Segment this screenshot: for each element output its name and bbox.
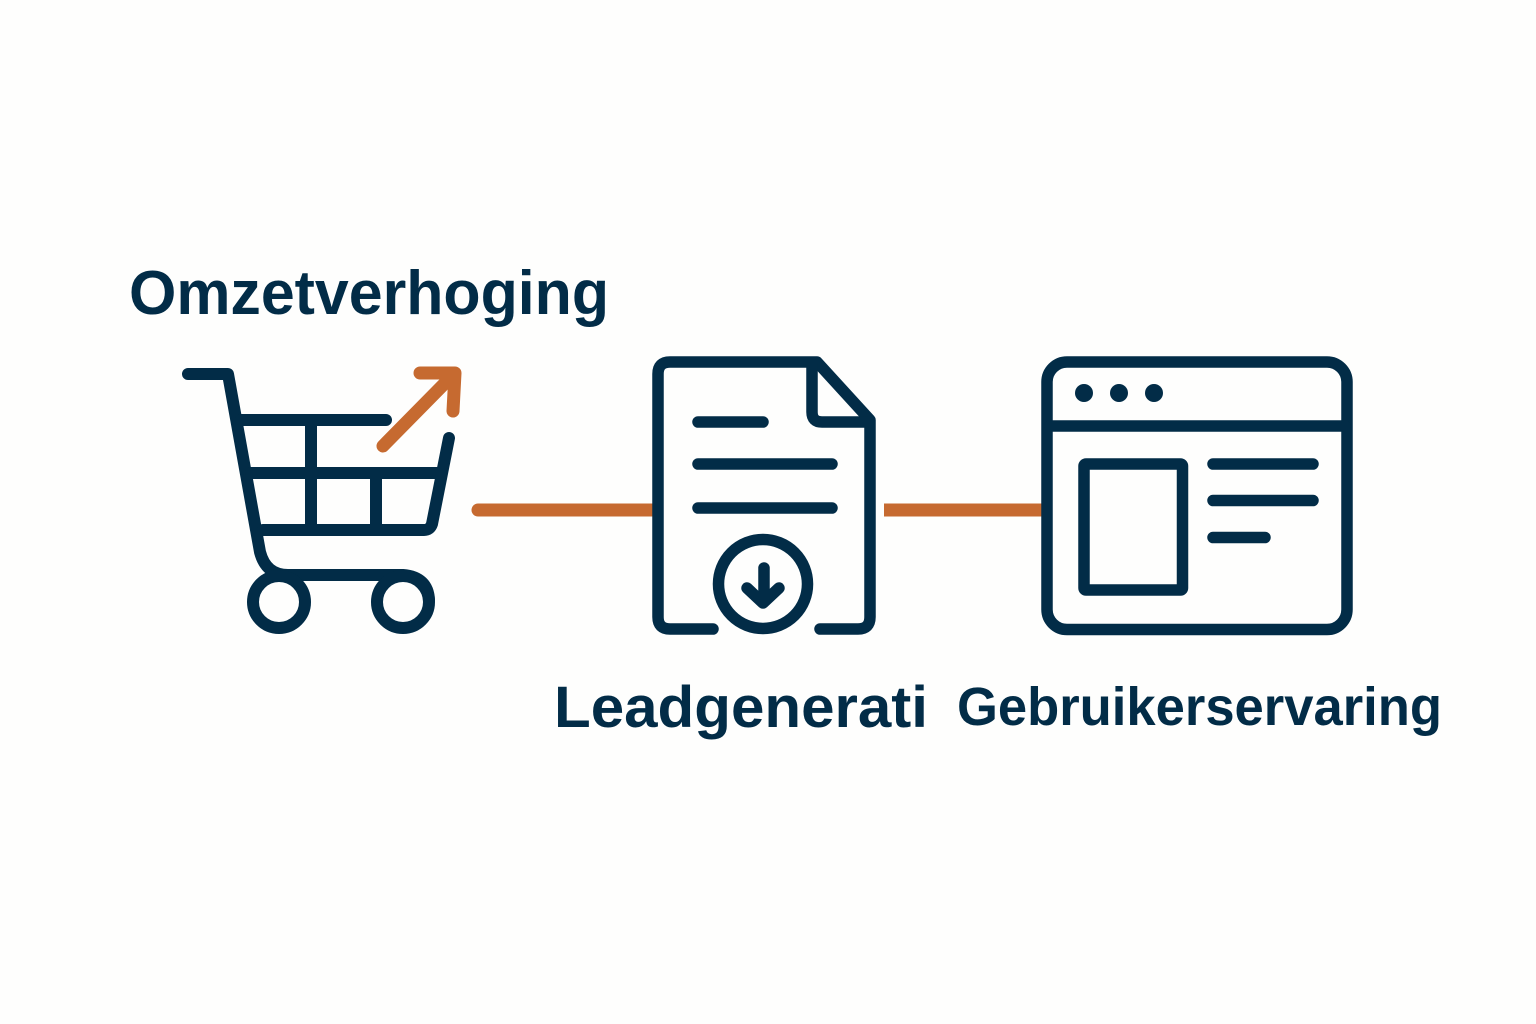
connector: cart to document [478,504,653,516]
content lines [1213,464,1313,538]
icon: shopping cart with growth arrow [188,373,455,628]
growth arrow [383,373,455,446]
download circle [718,540,808,628]
icon: browser window [1047,362,1347,630]
title bar divider [1050,420,1345,432]
connector: document to browser [884,504,1043,516]
heading: Omzetverhoging: Omzetverhoging [129,259,609,328]
cart basket [241,420,449,530]
icon: document with download [658,362,870,629]
window frame [1047,362,1347,630]
cart right wheel [377,576,429,628]
cart frame [188,374,429,600]
heading: Leadgenerati: Leadgenerati [554,675,928,740]
download arrow [747,568,779,603]
folded corner [812,364,868,422]
heading: Gebruikerservaring: Gebruikerservaring [957,677,1442,737]
document text lines [698,422,832,508]
cart left wheel [253,576,305,628]
image placeholder [1084,464,1182,590]
title bar dots [1075,384,1163,402]
document outline [658,362,870,629]
